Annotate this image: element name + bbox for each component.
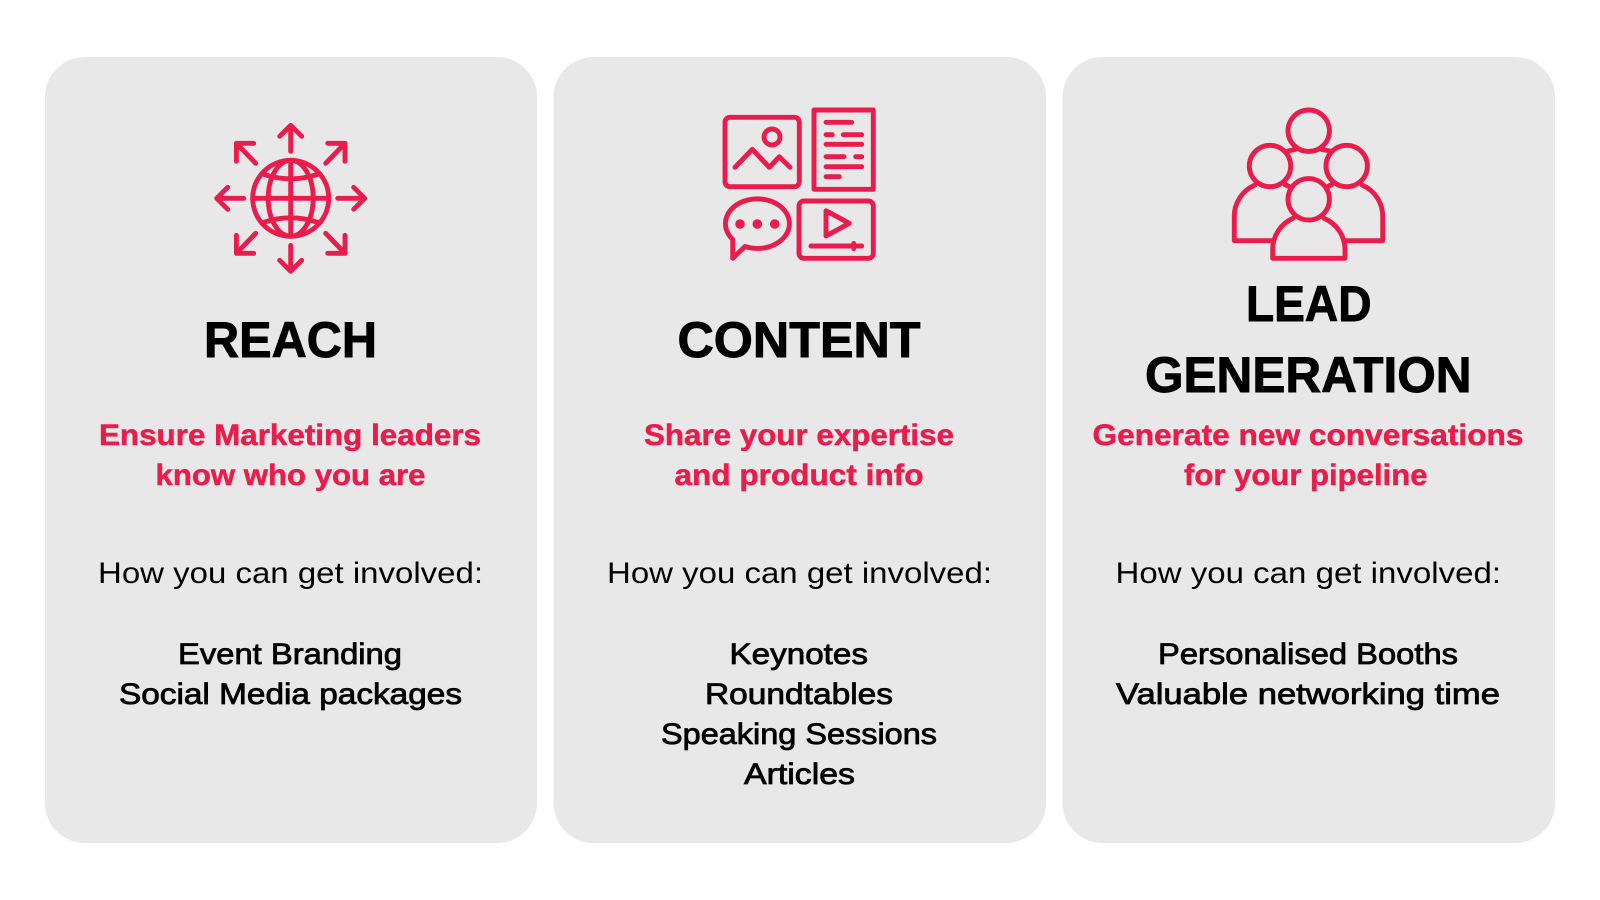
list: lead generation options: Valuable networking time (1116, 678, 1500, 711)
heading: lead generation: LEAD (1246, 276, 1372, 332)
subtitle: content: and product info (674, 459, 924, 492)
subtitle: reach: Ensure Marketing leaders (99, 419, 481, 452)
icon part: speech bubble (725, 199, 789, 258)
list: lead generation options: Personalised Booths (1158, 638, 1458, 671)
list: content options (661, 638, 937, 791)
icon: content formats (725, 110, 873, 258)
subtitle: reach: know who you are (156, 459, 426, 492)
intro text: lead generation: How you can get involved: (1116, 557, 1501, 590)
subtitle: content (644, 419, 954, 492)
list: content options: Keynotes (730, 638, 868, 671)
heading: lead generation (1145, 276, 1472, 403)
panel: content (554, 57, 1046, 843)
icon part: document (814, 110, 873, 189)
list: content options: Roundtables (705, 678, 893, 711)
list: lead generation options (1116, 638, 1500, 711)
panel: lead generation (1062, 57, 1555, 843)
subtitle: lead generation: Generate new conversations (1092, 419, 1524, 452)
intro text: content: How you can get involved: (607, 557, 992, 590)
heading: lead generation: GENERATION (1145, 347, 1472, 403)
card background: lead generation (1062, 57, 1555, 843)
subtitle: lead generation: for your pipeline (1184, 459, 1428, 492)
list: content options: Articles (744, 758, 855, 791)
list: reach options: Social Media packages (119, 678, 462, 711)
list: reach options: Event Branding (178, 638, 402, 671)
subtitle: content: Share your expertise (644, 419, 954, 452)
icon part: video player (799, 201, 873, 258)
icon part: image frame (725, 117, 799, 187)
icon: globe with arrows (217, 125, 365, 271)
list: content options: Speaking Sessions (661, 718, 937, 751)
card background: reach (45, 57, 537, 843)
icon: group of people (1234, 110, 1383, 258)
subtitle: reach (99, 419, 481, 492)
intro text: reach: How you can get involved: (98, 557, 483, 590)
card background: content (554, 57, 1046, 843)
heading: reach: REACH (204, 312, 377, 368)
panel: reach (45, 57, 537, 843)
subtitle: lead generation (1092, 419, 1524, 492)
heading: content: CONTENT (678, 312, 920, 368)
list: reach options (119, 638, 462, 711)
